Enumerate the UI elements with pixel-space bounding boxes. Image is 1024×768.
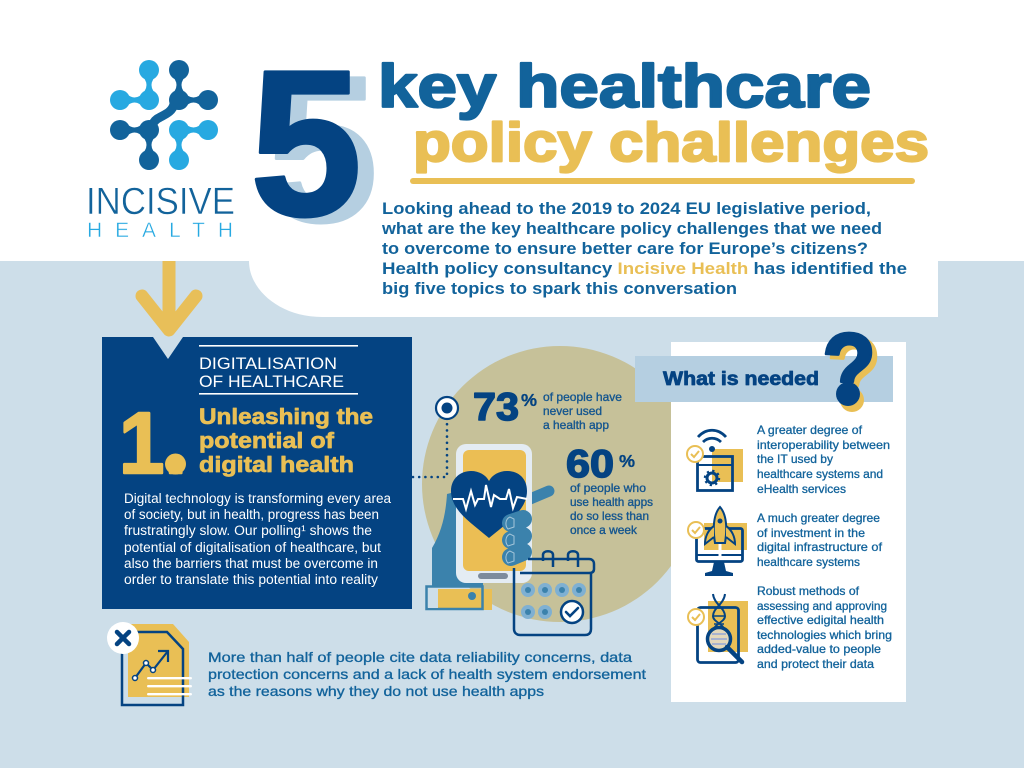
text: robust methods: added-value to people <box>757 642 881 656</box>
logo mark <box>110 60 218 170</box>
panel category heading: OF HEALTHCARE <box>199 372 344 391</box>
stat: 60 percent: 60 <box>566 443 614 486</box>
stat: 60 percent: of people who <box>570 481 646 495</box>
intro paragraph: Looking ahead to the 2019 to 2024 EU legislative period, <box>382 199 871 218</box>
icon: question mark: ? <box>827 317 881 427</box>
icon: wifi and window <box>687 430 743 490</box>
panel body text: Digital technology is transforming every area <box>124 491 391 506</box>
icon: calendar <box>514 551 594 635</box>
stat: 60 percent: do so less than <box>570 509 649 523</box>
panel body text <box>124 491 391 587</box>
title: key healthcare <box>378 53 871 120</box>
icon: hand holding phone with heart <box>426 444 549 610</box>
panel heading: potential of <box>199 428 335 453</box>
dotted connector <box>413 420 447 477</box>
panel body text: also the barriers that must be overcome in <box>124 556 378 571</box>
arrow: down to panel <box>142 261 196 330</box>
intro paragraph <box>381 199 907 298</box>
text: robust methods: effective edigital health <box>757 613 884 627</box>
text: investment: digital infrastructure of <box>757 540 883 554</box>
stat: 60 percent <box>566 443 653 537</box>
text: investment: A much greater degree <box>757 511 880 525</box>
logo: Incisive Health <box>86 60 235 242</box>
stat: 73 percent: never used <box>543 404 602 418</box>
text: interoperability: A greater degree of <box>757 423 863 437</box>
text: interoperability: eHealth services <box>757 482 846 496</box>
text: interoperability <box>757 423 890 496</box>
icon: target marker <box>436 397 458 419</box>
header white band <box>0 0 1024 317</box>
panel: digitalisation of healthcare <box>102 337 412 609</box>
heading banner <box>635 356 893 402</box>
icon: question mark: ? <box>822 313 876 423</box>
icon: rocket and monitor <box>688 507 747 576</box>
stat: 60 percent: use health apps <box>570 495 653 509</box>
big number 5: 5 <box>250 28 362 260</box>
stat: 60 percent: once a week <box>570 523 638 537</box>
text: investment: of investment in the <box>757 526 865 540</box>
icon: DNA and magnifier <box>688 594 748 662</box>
panel heading: Unleashing the <box>199 404 373 429</box>
text: robust methods: technologies which bring <box>757 628 892 642</box>
stat: 73 percent: 73 <box>473 386 519 429</box>
text: robust methods: and protect their data <box>757 657 874 671</box>
callout text: data concerns <box>208 649 646 699</box>
big number 5: 5 <box>266 34 378 266</box>
callout text: data concerns: as the reasons why they do not use health apps <box>208 683 544 699</box>
intro paragraph: big five topics to spark this conversation <box>382 279 737 298</box>
heading: what is needed: What is needed <box>663 369 819 390</box>
panel heading: digital health <box>199 452 354 477</box>
intro paragraph: what are the key healthcare policy challenges that we need <box>381 219 882 238</box>
tan circle backdrop <box>422 346 698 622</box>
intro paragraph: to overcome to ensure better care for Europe’s citizens? <box>382 239 868 258</box>
number 1: 1. <box>119 395 187 492</box>
text: interoperability: healthcare systems and <box>757 467 883 481</box>
panel category heading <box>199 354 344 391</box>
title underline <box>410 178 915 184</box>
panel body text: order to translate this potential into reality <box>124 572 378 587</box>
icon: document with chart <box>107 622 192 705</box>
callout text: data concerns: More than half of people cite data reliability concerns, data <box>208 649 632 665</box>
panel body text: potential of digitalisation of healthcare, but <box>124 540 381 555</box>
panel: what is needed <box>635 313 906 702</box>
title <box>378 53 929 173</box>
title: policy challenges <box>413 111 929 173</box>
panel body text: frustratingly slow. Our polling¹ shows the <box>124 523 372 538</box>
panel heading <box>199 404 373 477</box>
text: interoperability: the IT used by <box>757 452 833 466</box>
logo subword: HEALTH <box>87 219 233 242</box>
intro paragraph: Health policy consultancy Incisive Health has identified the <box>382 259 907 278</box>
text: robust methods: assessing and approving <box>757 599 887 613</box>
text: investment <box>757 511 883 569</box>
panel body text: of society, but in health, progress has been <box>124 507 379 522</box>
panel category heading: DIGITALISATION <box>199 354 337 373</box>
logo wordmark: INCISIVE <box>86 181 235 223</box>
text: robust methods: Robust methods of <box>757 584 860 598</box>
text: robust methods <box>757 584 892 671</box>
stat: 73 percent <box>473 386 622 432</box>
stat: 73 percent: of people have <box>543 390 622 404</box>
text: interoperability: interoperability between <box>757 438 890 452</box>
stat: 60 percent: % <box>619 451 635 471</box>
text: investment: healthcare systems <box>757 555 860 569</box>
stat: 73 percent: % <box>521 390 537 410</box>
stat: 73 percent: a health app <box>543 418 609 432</box>
callout text: data concerns: protection concerns and a lack of health system endorsement <box>208 666 646 682</box>
